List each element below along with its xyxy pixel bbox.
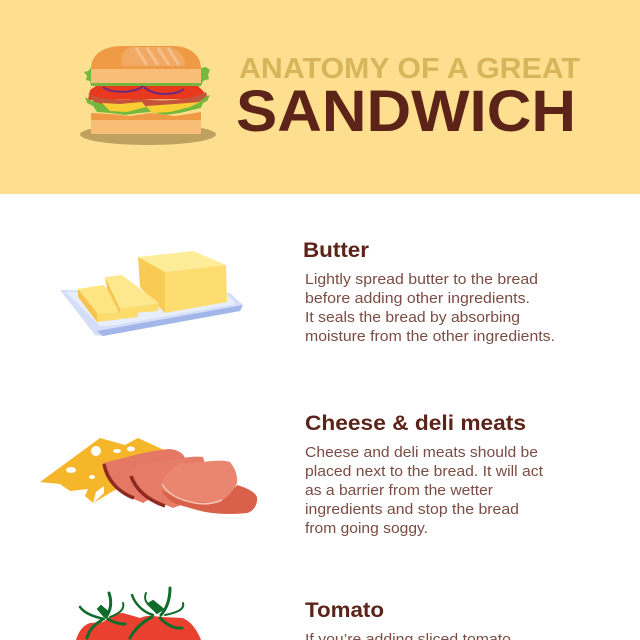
heading: tomato: Tomato [305, 599, 384, 622]
title line two: SANDWICH [236, 79, 576, 144]
text: cheese and deli meats description: from going soggy. [305, 520, 428, 537]
text: cheese and deli meats description: ingredients and stop the bread [305, 501, 519, 518]
text: cheese and deli meats description [305, 444, 544, 537]
title line one: ANATOMY OF A GREAT [239, 53, 581, 85]
deli meat slice one [103, 449, 188, 503]
deli meat slice two [130, 457, 208, 508]
text: butter description: It seals the bread by absorbing [305, 309, 520, 326]
text: butter description [305, 271, 555, 345]
text: butter description: before adding other ingredients. [305, 290, 530, 307]
tomato stem: right [130, 588, 183, 638]
icon: sandwich [80, 46, 216, 145]
icon: tomatoes [76, 588, 201, 640]
text: cheese and deli meats description: as a barrier from the wetter [305, 482, 493, 499]
heading: butter: Butter [303, 239, 369, 262]
butter block [138, 251, 227, 313]
header banner [0, 0, 640, 194]
icon: cheese slices and deli meats [40, 438, 257, 514]
icon: butter on a dish [60, 251, 243, 336]
text: cheese and deli meats description: Cheese and deli meats should be [305, 444, 538, 461]
text: butter description: Lightly spread butter to the bread [305, 271, 538, 288]
tomato stem: left [80, 593, 125, 638]
text: cheese and deli meats description: placed next to the bread. It will act [305, 463, 544, 480]
deli meat slice three [162, 461, 257, 514]
butter slice: middle [105, 275, 159, 314]
cheese slices [40, 438, 164, 503]
heading: cheese and deli meats: Cheese & deli meats [305, 412, 526, 435]
text: butter description: moisture from the other ingredients. [305, 328, 555, 345]
butter slice: front [78, 285, 138, 322]
